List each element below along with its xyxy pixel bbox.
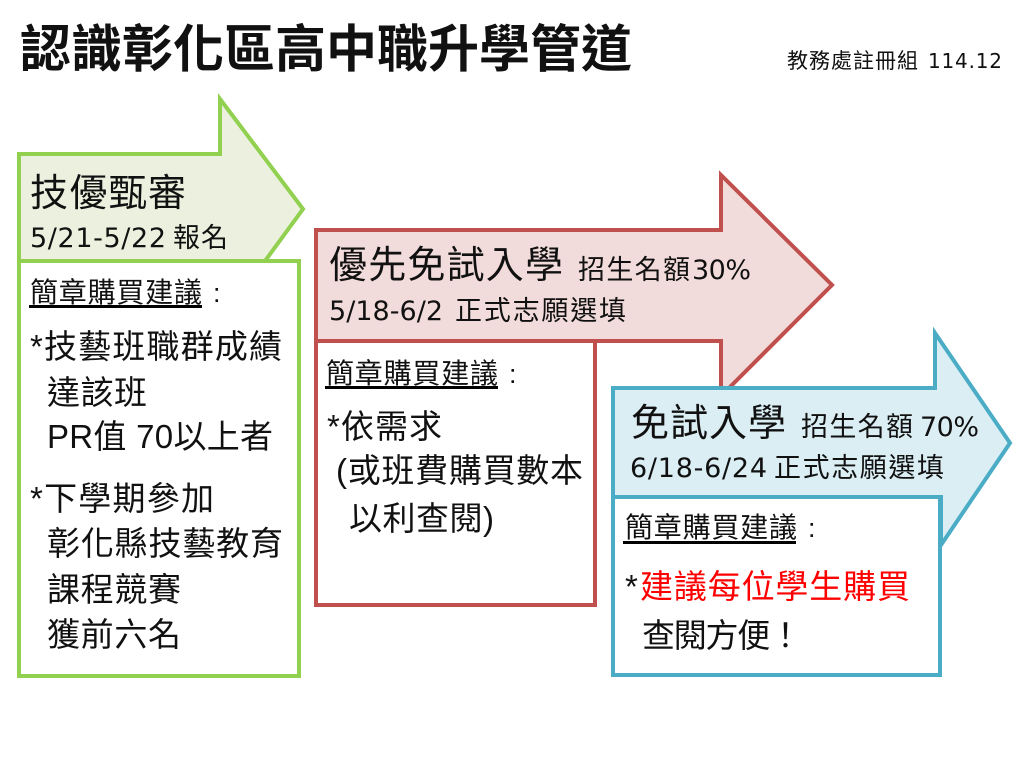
dates: priority admission: 5/18-6/2 — [329, 296, 443, 327]
advice text: talent screening: 彰化縣技藝教育 — [47, 525, 283, 562]
advice text: talent screening: 達該班 — [47, 374, 147, 411]
dates: talent screening: 5/21-5/22 — [30, 223, 166, 254]
arrow: talent screening — [19, 99, 303, 261]
box: priority admission advice — [316, 341, 595, 605]
advice text: priority admission — [327, 408, 583, 537]
office and date note — [787, 49, 1002, 73]
advice text: priority admission: (或班費購買數本 — [336, 452, 583, 489]
advice label: 簡章購買建議 — [625, 512, 797, 543]
arrow: exam-free admission — [613, 333, 1010, 545]
dates: exam-free admission: 6/18-6/24 — [630, 453, 767, 484]
advice text: talent screening — [30, 328, 283, 653]
dates: priority admission — [329, 296, 626, 327]
heading: talent screening: 技優甄審 — [30, 173, 186, 215]
advice text: exam-free admission — [625, 568, 910, 654]
dates: exam-free admission: 正式志願選填 — [774, 453, 944, 483]
advice text: priority admission: *依需求 — [327, 408, 442, 445]
box: talent screening advice — [19, 261, 299, 676]
advice label: : — [509, 359, 517, 389]
advice label: : — [808, 513, 816, 543]
quota: priority admission: 30% — [692, 255, 751, 286]
dates: talent screening: 報名 — [173, 223, 228, 253]
advice text: talent screening: 課程競賽 — [47, 571, 181, 608]
advice label: 簡章購買建議 — [30, 277, 202, 308]
advice label: : — [213, 278, 221, 308]
quota: priority admission: 招生名額 — [578, 255, 690, 285]
office and date note: 114.12 — [928, 49, 1002, 73]
advice text: priority admission: 以利查閱) — [349, 500, 494, 537]
dates: talent screening — [30, 223, 228, 254]
quota: exam-free admission: 招生名額 — [801, 412, 913, 442]
advice text: talent screening: *下學期參加 — [30, 480, 214, 517]
panel: exam-free admission — [613, 333, 1010, 675]
office and date note: 教務處註冊組 — [787, 50, 918, 73]
advice text: talent screening: *技藝班職群成績 — [30, 328, 282, 365]
advice text: talent screening: PR值 70以上者 — [47, 418, 273, 455]
dates: exam-free admission — [630, 453, 944, 484]
advice text: talent screening: 獲前六名 — [47, 616, 181, 653]
panel: priority admission — [316, 175, 832, 605]
advice text: exam-free admission: 建議每位學生購買 — [640, 568, 910, 605]
heading: priority admission: 優先免試入學 — [329, 245, 563, 287]
advice text: exam-free admission: * — [625, 568, 638, 605]
quota: priority admission — [578, 255, 751, 286]
quota: exam-free admission: 70% — [920, 412, 979, 443]
dates: priority admission: 正式志願選填 — [455, 296, 626, 326]
panel: talent screening — [19, 99, 303, 676]
arrow: priority admission — [316, 175, 832, 392]
box: exam-free admission advice — [613, 497, 940, 675]
advice label: 簡章購買建議 — [326, 358, 498, 389]
title: 認識彰化區高中職升學管道 — [20, 21, 632, 78]
advice text: exam-free admission: 查閱方便！ — [642, 617, 802, 654]
heading: exam-free admission: 免試入學 — [631, 403, 786, 445]
quota: exam-free admission — [801, 412, 979, 443]
